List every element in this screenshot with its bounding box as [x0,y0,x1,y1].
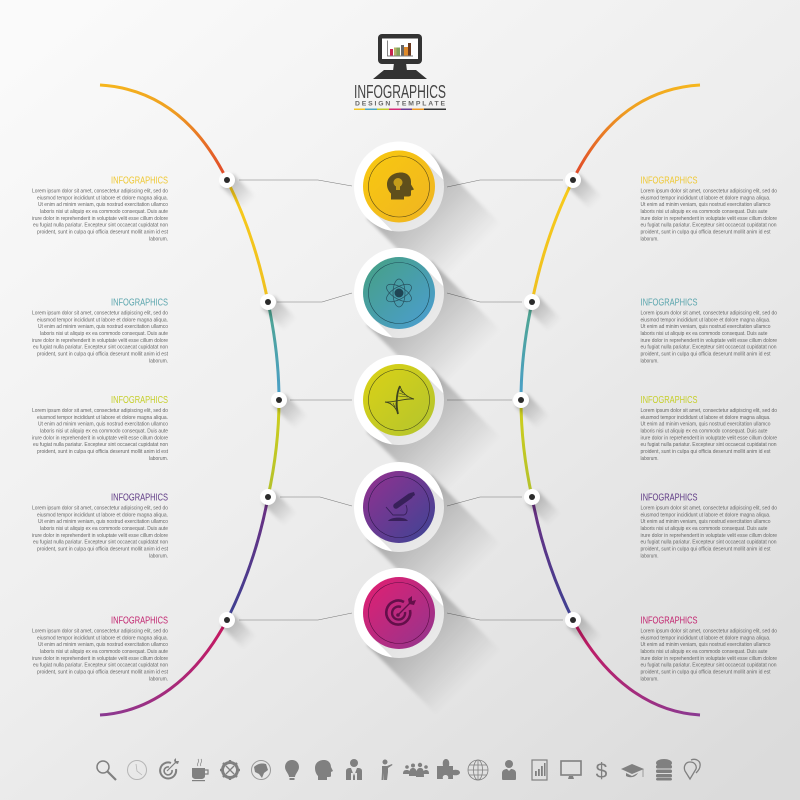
icon: target with arrow [386,596,416,625]
body text: eiusmod tempor incididunt ut labore et dolore magna aliqua. [640,512,771,518]
body text: eiusmod tempor incididunt ut labore et dolore magna aliqua. [37,415,168,421]
body text: Lorem ipsum dolor sit amet, consectetur adipiscing elit, sed do [32,628,168,634]
node: right 4 [524,489,563,528]
body text: eu fugiat nulla pariatur. Excepteur sint occaecat cupidatat non [640,663,776,669]
heading: INFOGRAPHICS [640,176,698,186]
bottom icon row [97,758,700,783]
text block: right 4 [640,492,777,559]
text blocks: left column [32,176,168,682]
body text: eu fugiat nulla pariatur. Excepteur sint occaecat cupidatat non [33,442,168,448]
body text: laboris nisi ut aliquip ex ea commodo consequat. Duis aute [40,428,168,434]
body text: eiusmod tempor incididunt ut labore et dolore magna aliqua. [640,415,771,421]
text block: left 1 [32,176,168,242]
text block: right 2 [640,298,777,364]
node: left 5 [219,612,258,651]
node markers on curves [219,172,604,651]
body text: irure dolor in reprehenderit in voluptate velit esse cillum dolore [32,533,168,539]
heading: INFOGRAPHICS [111,616,168,626]
text block: right 1 [640,176,777,242]
title: INFOGRAPHICS [354,82,446,102]
body text: proident, sunt in culpa qui officia deserunt mollit anim id est [37,546,168,552]
icon: head with light bulb [387,172,414,200]
body text: Ut enim ad minim veniam, quis nostrud exercitation ullamco [38,642,168,648]
badge 5: magenta, target [354,568,490,704]
body text: Lorem ipsum dolor sit amet, consectetur adipiscing elit, sed do [32,188,168,194]
body text: eu fugiat nulla pariatur. Excepteur sint occaecat cupidatat non [33,223,168,229]
text block: left 2 [32,298,168,364]
icon: globe [252,760,270,780]
icon: business person [346,759,362,780]
body text: irure dolor in reprehenderit in voluptate velit esse cillum dolore [640,435,777,441]
body text: irure dolor in reprehenderit in voluptate velit esse cillum dolore [640,216,777,222]
body text: Ut enim ad minim veniam, quis nostrud exercitation ullamco [640,642,770,648]
heading: INFOGRAPHICS [111,492,168,504]
body text [640,408,777,462]
body text: laborum. [149,358,168,364]
body text: Lorem ipsum dolor sit amet, consectetur adipiscing elit, sed do [32,408,168,414]
icon: presenter [382,760,392,780]
body text: laborum. [149,236,168,242]
body text: Lorem ipsum dolor sit amet, consectetur adipiscing elit, sed do [640,408,777,414]
badge 3: lime, DNA [354,355,490,482]
header: monitor icon and title [354,34,446,110]
heading: INFOGRAPHICS [640,298,698,308]
body text: proident, sunt in culpa qui officia deserunt mollit anim id est [37,449,168,455]
body text: irure dolor in reprehenderit in voluptate velit esse cillum dolore [32,656,168,662]
body text: Lorem ipsum dolor sit amet, consectetur adipiscing elit, sed do [32,506,168,512]
left curve [100,85,279,715]
node: left 2 [260,294,299,333]
icon: user [502,760,516,780]
body text: irure dolor in reprehenderit in voluptate velit esse cillum dolore [32,435,168,441]
body text [32,506,168,559]
body text: eu fugiat nulla pariatur. Excepteur sint occaecat cupidatat non [640,223,776,229]
right curve [521,85,700,715]
body text: Ut enim ad minim veniam, quis nostrud exercitation ullamco [640,324,770,330]
body text: eiusmod tempor incididunt ut labore et dolore magna aliqua. [37,512,168,518]
body text [640,506,777,559]
body text: Lorem ipsum dolor sit amet, consectetur adipiscing elit, sed do [640,628,777,634]
body text: eiusmod tempor incididunt ut labore et dolore magna aliqua. [640,195,771,201]
body text: laborum. [149,676,168,682]
icon: coin stack [656,759,672,780]
body text: proident, sunt in culpa qui officia deserunt mollit anim id est [37,230,168,236]
body text: proident, sunt in culpa qui officia deserunt mollit anim id est [640,546,771,552]
body text: Lorem ipsum dolor sit amet, consectetur adipiscing elit, sed do [32,310,168,316]
body text: laborum. [640,676,659,682]
body text: eu fugiat nulla pariatur. Excepteur sint occaecat cupidatat non [33,540,168,546]
heading: INFOGRAPHICS [640,616,698,626]
body text: proident, sunt in culpa qui officia deserunt mollit anim id est [37,352,168,358]
icon: atom [384,279,414,307]
body text: laborum. [640,456,659,462]
heading: INFOGRAPHICS [640,395,698,406]
body text: laboris nisi ut aliquip ex ea commodo consequat. Duis aute [40,649,168,655]
body text: laboris nisi ut aliquip ex ea commodo consequat. Duis aute [640,428,768,434]
icon: microscope [386,492,415,521]
body text: proident, sunt in culpa qui officia deserunt mollit anim id est [640,352,771,358]
body text: irure dolor in reprehenderit in voluptate velit esse cillum dolore [32,338,168,344]
node: right 5 [565,612,604,651]
body text: proident, sunt in culpa qui officia deserunt mollit anim id est [640,230,771,236]
body text [32,628,168,682]
body text: laborum. [640,358,659,364]
body text: laboris nisi ut aliquip ex ea commodo consequat. Duis aute [640,649,768,655]
body text: eiusmod tempor incididunt ut labore et dolore magna aliqua. [640,635,771,641]
body text: proident, sunt in culpa qui officia deserunt mollit anim id est [37,670,168,676]
body text [640,628,777,682]
heading: INFOGRAPHICS [111,176,168,186]
body text: eu fugiat nulla pariatur. Excepteur sint occaecat cupidatat non [33,663,168,669]
body text: irure dolor in reprehenderit in voluptate velit esse cillum dolore [32,216,168,222]
icon: wire globe [468,760,488,780]
body text: Ut enim ad minim veniam, quis nostrud exercitation ullamco [38,324,168,330]
body text: Ut enim ad minim veniam, quis nostrud exercitation ullamco [640,422,770,428]
heading: INFOGRAPHICS [111,395,168,406]
colour underline [354,108,446,110]
text block: left 5 [32,616,168,682]
body text: irure dolor in reprehenderit in voluptate velit esse cillum dolore [640,656,777,662]
body text: laboris nisi ut aliquip ex ea commodo consequat. Duis aute [40,331,168,337]
icon: monitor [561,761,581,779]
body text [32,188,168,242]
icon: tablet chart [532,760,547,780]
icon: clock [128,760,146,780]
body text: laboris nisi ut aliquip ex ea commodo consequat. Duis aute [40,209,168,215]
body text: laboris nisi ut aliquip ex ea commodo consequat. Duis aute [640,331,768,337]
icon: coffee cup [192,759,208,781]
body text: eu fugiat nulla pariatur. Excepteur sint occaecat cupidatat non [640,442,776,448]
body text: Ut enim ad minim veniam, quis nostrud exercitation ullamco [38,202,168,208]
body text: laborum. [640,236,659,242]
icon: head profile [315,760,333,780]
node: left 1 [219,172,258,211]
body text: laboris nisi ut aliquip ex ea commodo consequat. Duis aute [640,526,768,532]
node: left 4 [260,489,299,528]
icon: team [403,763,429,777]
body text: laborum. [640,553,659,559]
body text: eiusmod tempor incididunt ut labore et dolore magna aliqua. [37,195,168,201]
body text: laboris nisi ut aliquip ex ea commodo consequat. Duis aute [640,209,768,215]
icon: location pins [684,759,700,779]
subtitle: DESIGN TEMPLATE [355,100,445,108]
icon: light bulb [285,760,299,780]
body text [32,408,168,462]
node: right 2 [524,294,563,333]
icon: puzzle piece [437,759,460,779]
body text: Ut enim ad minim veniam, quis nostrud exercitation ullamco [38,519,168,525]
body text: proident, sunt in culpa qui officia deserunt mollit anim id est [640,449,771,455]
body text: irure dolor in reprehenderit in voluptate velit esse cillum dolore [640,533,777,539]
text blocks: right column [640,176,777,682]
body text: eiusmod tempor incididunt ut labore et dolore magna aliqua. [37,635,168,641]
badge 1: yellow, head with bulb [354,142,490,268]
icon: target [160,758,179,778]
badge 4: purple, microscope [354,462,490,588]
body text [640,310,777,364]
badge 2: teal, atom [354,248,490,375]
body text: laborum. [149,456,168,462]
body text: Ut enim ad minim veniam, quis nostrud exercitation ullamco [38,422,168,428]
icon: gear [220,760,240,780]
icon: monitor with bar chart [373,34,427,79]
body text: eiusmod tempor incididunt ut labore et dolore magna aliqua. [640,317,771,323]
heading: INFOGRAPHICS [111,298,168,308]
body text [640,188,777,242]
icon: DNA helix [385,386,414,414]
body text: Lorem ipsum dolor sit amet, consectetur adipiscing elit, sed do [640,188,777,194]
body text [32,310,168,364]
body text: proident, sunt in culpa qui officia deserunt mollit anim id est [640,670,771,676]
body text: laborum. [149,553,168,559]
body text: Lorem ipsum dolor sit amet, consectetur adipiscing elit, sed do [640,506,777,512]
body text: eiusmod tempor incididunt ut labore et dolore magna aliqua. [37,317,168,323]
node: left 3 [271,392,310,431]
heading: INFOGRAPHICS [640,492,698,504]
icon: magnifier [97,761,116,780]
icon: dollar sign: $ [596,760,608,783]
node: right 3 [513,392,552,431]
text block: left 3 [32,395,168,462]
body text: eu fugiat nulla pariatur. Excepteur sint occaecat cupidatat non [33,345,168,351]
body text: Ut enim ad minim veniam, quis nostrud exercitation ullamco [640,519,770,525]
body text: Lorem ipsum dolor sit amet, consectetur adipiscing elit, sed do [640,310,777,316]
node: right 1 [565,172,604,211]
body text: Ut enim ad minim veniam, quis nostrud exercitation ullamco [640,202,770,208]
body text: laboris nisi ut aliquip ex ea commodo consequat. Duis aute [40,526,168,532]
icon: graduation cap [621,764,644,777]
body text: irure dolor in reprehenderit in voluptate velit esse cillum dolore [640,338,777,344]
connector lines [239,180,563,620]
text block: right 3 [640,395,777,462]
text block: left 4 [32,492,168,559]
body text: eu fugiat nulla pariatur. Excepteur sint occaecat cupidatat non [640,540,776,546]
body text: eu fugiat nulla pariatur. Excepteur sint occaecat cupidatat non [640,345,776,351]
text block: right 5 [640,616,777,682]
